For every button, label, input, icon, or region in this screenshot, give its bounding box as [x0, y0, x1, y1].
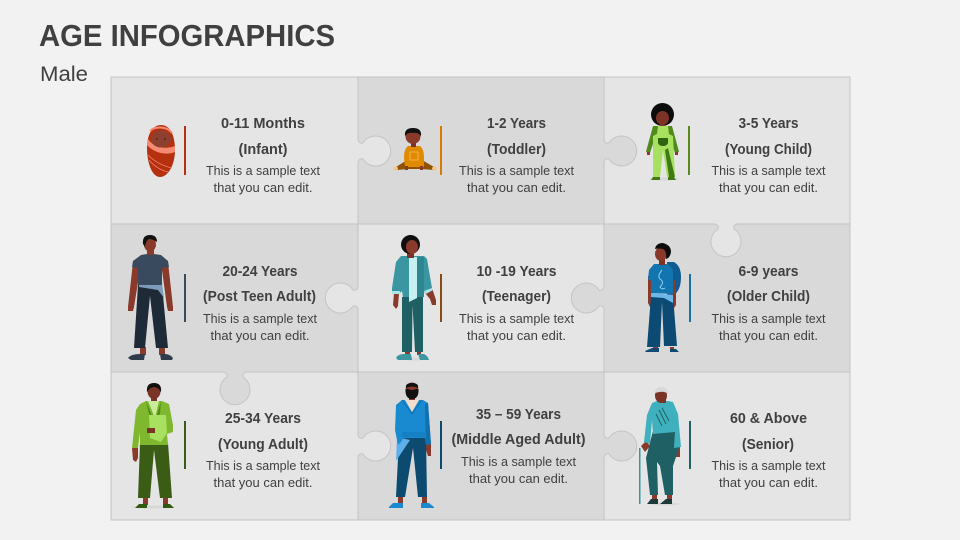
heading: 1-2 Years — [487, 116, 546, 132]
sublabel: (Toddler) — [487, 142, 546, 158]
sublabel: (Middle Aged Adult) — [452, 432, 586, 448]
body text — [206, 164, 321, 195]
heading: 20-24 Years — [222, 264, 298, 280]
puzzle piece: 6-9 years — [571, 224, 850, 372]
body text: that you can edit. — [719, 476, 818, 490]
card: 3-5 Years — [646, 103, 826, 195]
body text: This is a sample text — [712, 459, 826, 473]
accent bar — [440, 126, 442, 175]
puzzle piece: 35-59 years — [358, 372, 637, 520]
body text: that you can edit. — [467, 181, 566, 195]
body text: This is a sample text — [461, 455, 577, 469]
sublabel: (Young Child) — [725, 142, 812, 158]
puzzle piece: 3-5 years — [604, 77, 850, 257]
heading: 10 -19 Years — [476, 264, 556, 280]
body text: that you can edit. — [467, 329, 566, 343]
icon: teenager — [392, 235, 436, 360]
heading: 60 & Above — [730, 411, 807, 427]
body text: This is a sample text — [712, 312, 826, 326]
body text — [461, 455, 577, 486]
sublabel: (Post Teen Adult) — [203, 289, 316, 305]
card: 10-19 Years — [392, 235, 575, 360]
body text — [459, 312, 575, 343]
sublabel: (Senior) — [742, 437, 794, 453]
puzzle piece: 0-11 months — [111, 77, 391, 224]
icon: young adult with folder — [131, 383, 175, 508]
body text — [459, 164, 575, 195]
body text: This is a sample text — [203, 312, 318, 326]
body text: that you can edit. — [719, 329, 818, 343]
body text: This is a sample text — [459, 312, 575, 326]
title: AGE INFOGRAPHICS — [39, 18, 335, 53]
card: 35-59 Years — [389, 382, 586, 508]
body text — [712, 312, 826, 343]
puzzle piece: 1-2 years — [358, 77, 637, 224]
heading: 3-5 Years — [738, 116, 798, 132]
body text — [712, 459, 826, 490]
body text — [206, 459, 321, 490]
body text: This is a sample text — [206, 459, 321, 473]
body text: that you can edit. — [214, 476, 312, 490]
heading: 0-11 Months — [221, 116, 305, 132]
subtitle: Male — [40, 63, 88, 86]
sublabel: (Infant) — [238, 142, 288, 158]
accent bar — [689, 421, 691, 469]
accent bar — [184, 274, 186, 322]
icon: toddler sitting — [393, 128, 437, 170]
accent bar — [688, 126, 690, 175]
body text: This is a sample text — [712, 164, 826, 178]
body text — [712, 164, 826, 195]
body text: This is a sample text — [206, 164, 321, 178]
card: 0-11 Months — [147, 116, 321, 195]
accent bar — [440, 274, 442, 322]
puzzle piece: 25-34 years — [111, 372, 391, 520]
puzzle piece: 10-19 years — [325, 224, 604, 372]
accent bar — [689, 274, 691, 322]
heading: 25-34 Years — [225, 411, 301, 427]
accent bar — [440, 421, 442, 469]
sublabel: (Teenager) — [482, 289, 551, 305]
heading: 6-9 years — [738, 264, 798, 280]
icon: young child in overalls — [646, 103, 679, 180]
body text — [203, 312, 318, 343]
icon: senior with cane — [639, 387, 681, 506]
sublabel: (Young Adult) — [218, 437, 308, 453]
card: 25-34 Years — [131, 383, 321, 508]
body text: This is a sample text — [459, 164, 575, 178]
icon: post-teen adult — [128, 235, 173, 360]
accent bar — [184, 421, 186, 469]
body text: that you can edit. — [469, 472, 568, 486]
body text: that you can edit. — [719, 181, 818, 195]
sublabel: (Older Child) — [727, 289, 810, 305]
card: 6-9 Years — [645, 243, 826, 352]
body text: that you can edit. — [214, 181, 312, 195]
icon: middle aged adult — [389, 382, 434, 508]
card: 20-24 Years — [128, 235, 318, 360]
card: 60 and Above — [639, 387, 826, 506]
puzzle piece: 20-24 years — [111, 224, 358, 405]
card: 1-2 Years — [393, 116, 575, 195]
icon: older child with backpack — [645, 243, 681, 352]
puzzle piece: 60 and above — [604, 372, 850, 520]
accent bar — [184, 126, 186, 175]
icon: swaddled infant — [147, 125, 175, 177]
heading: 35 – 59 Years — [476, 407, 561, 423]
body text: that you can edit. — [210, 329, 310, 343]
